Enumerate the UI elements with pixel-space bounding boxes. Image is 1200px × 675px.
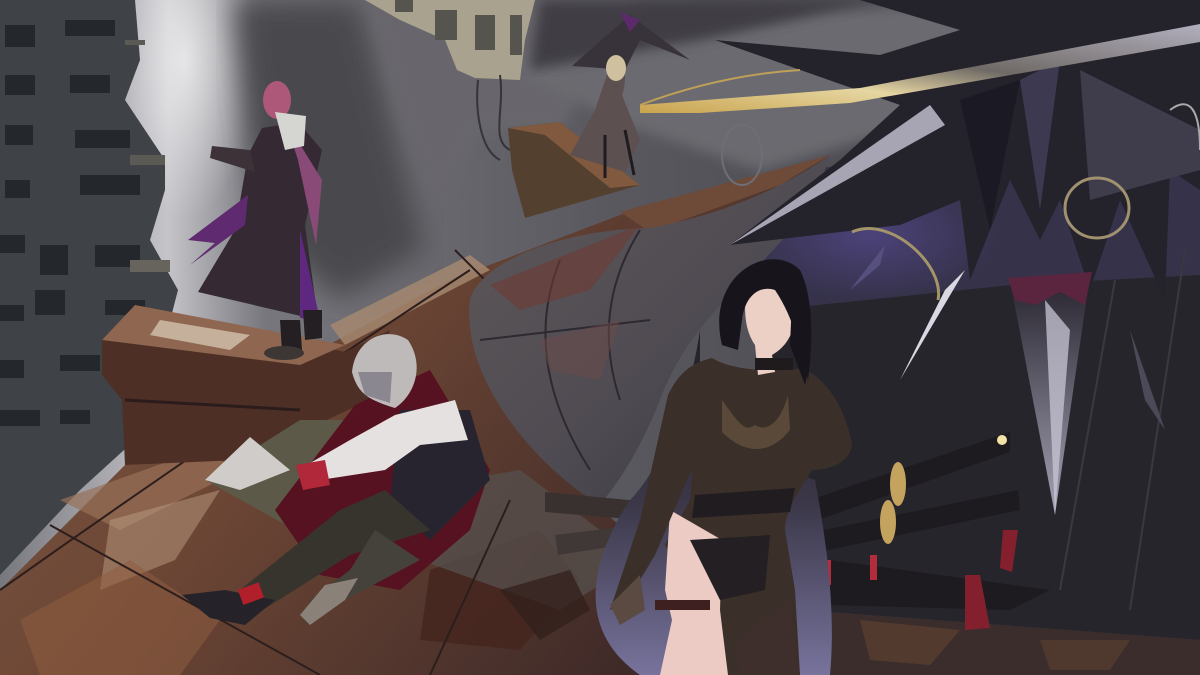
rusted lower ledge <box>102 305 390 465</box>
waist belt <box>692 488 795 518</box>
red sword tassels <box>825 530 1018 630</box>
head hair <box>719 259 811 380</box>
thigh <box>660 510 728 675</box>
rusted upper ledge <box>508 122 640 218</box>
golden sweeping blade <box>640 24 1200 113</box>
satellite dish surface <box>469 155 830 505</box>
seated man with silver hair <box>182 334 490 625</box>
stocking <box>735 600 800 675</box>
chest highlight <box>722 395 790 449</box>
collar <box>755 358 793 370</box>
dark right wall <box>730 130 1200 675</box>
arm <box>610 380 712 610</box>
hips <box>690 535 770 600</box>
thin floating rings <box>640 70 1200 300</box>
long hair <box>596 330 832 675</box>
woman with katanas <box>596 259 852 675</box>
dress <box>665 358 852 675</box>
hanging inverted building <box>365 0 535 160</box>
rusted curved deck <box>0 155 830 675</box>
katana swords <box>545 432 1020 560</box>
man with pink hair <box>188 81 322 360</box>
spiked crystal mass <box>715 0 1200 515</box>
seated blonde figure <box>570 12 690 178</box>
neck and face <box>745 283 796 375</box>
ruined tower at left <box>0 0 178 575</box>
